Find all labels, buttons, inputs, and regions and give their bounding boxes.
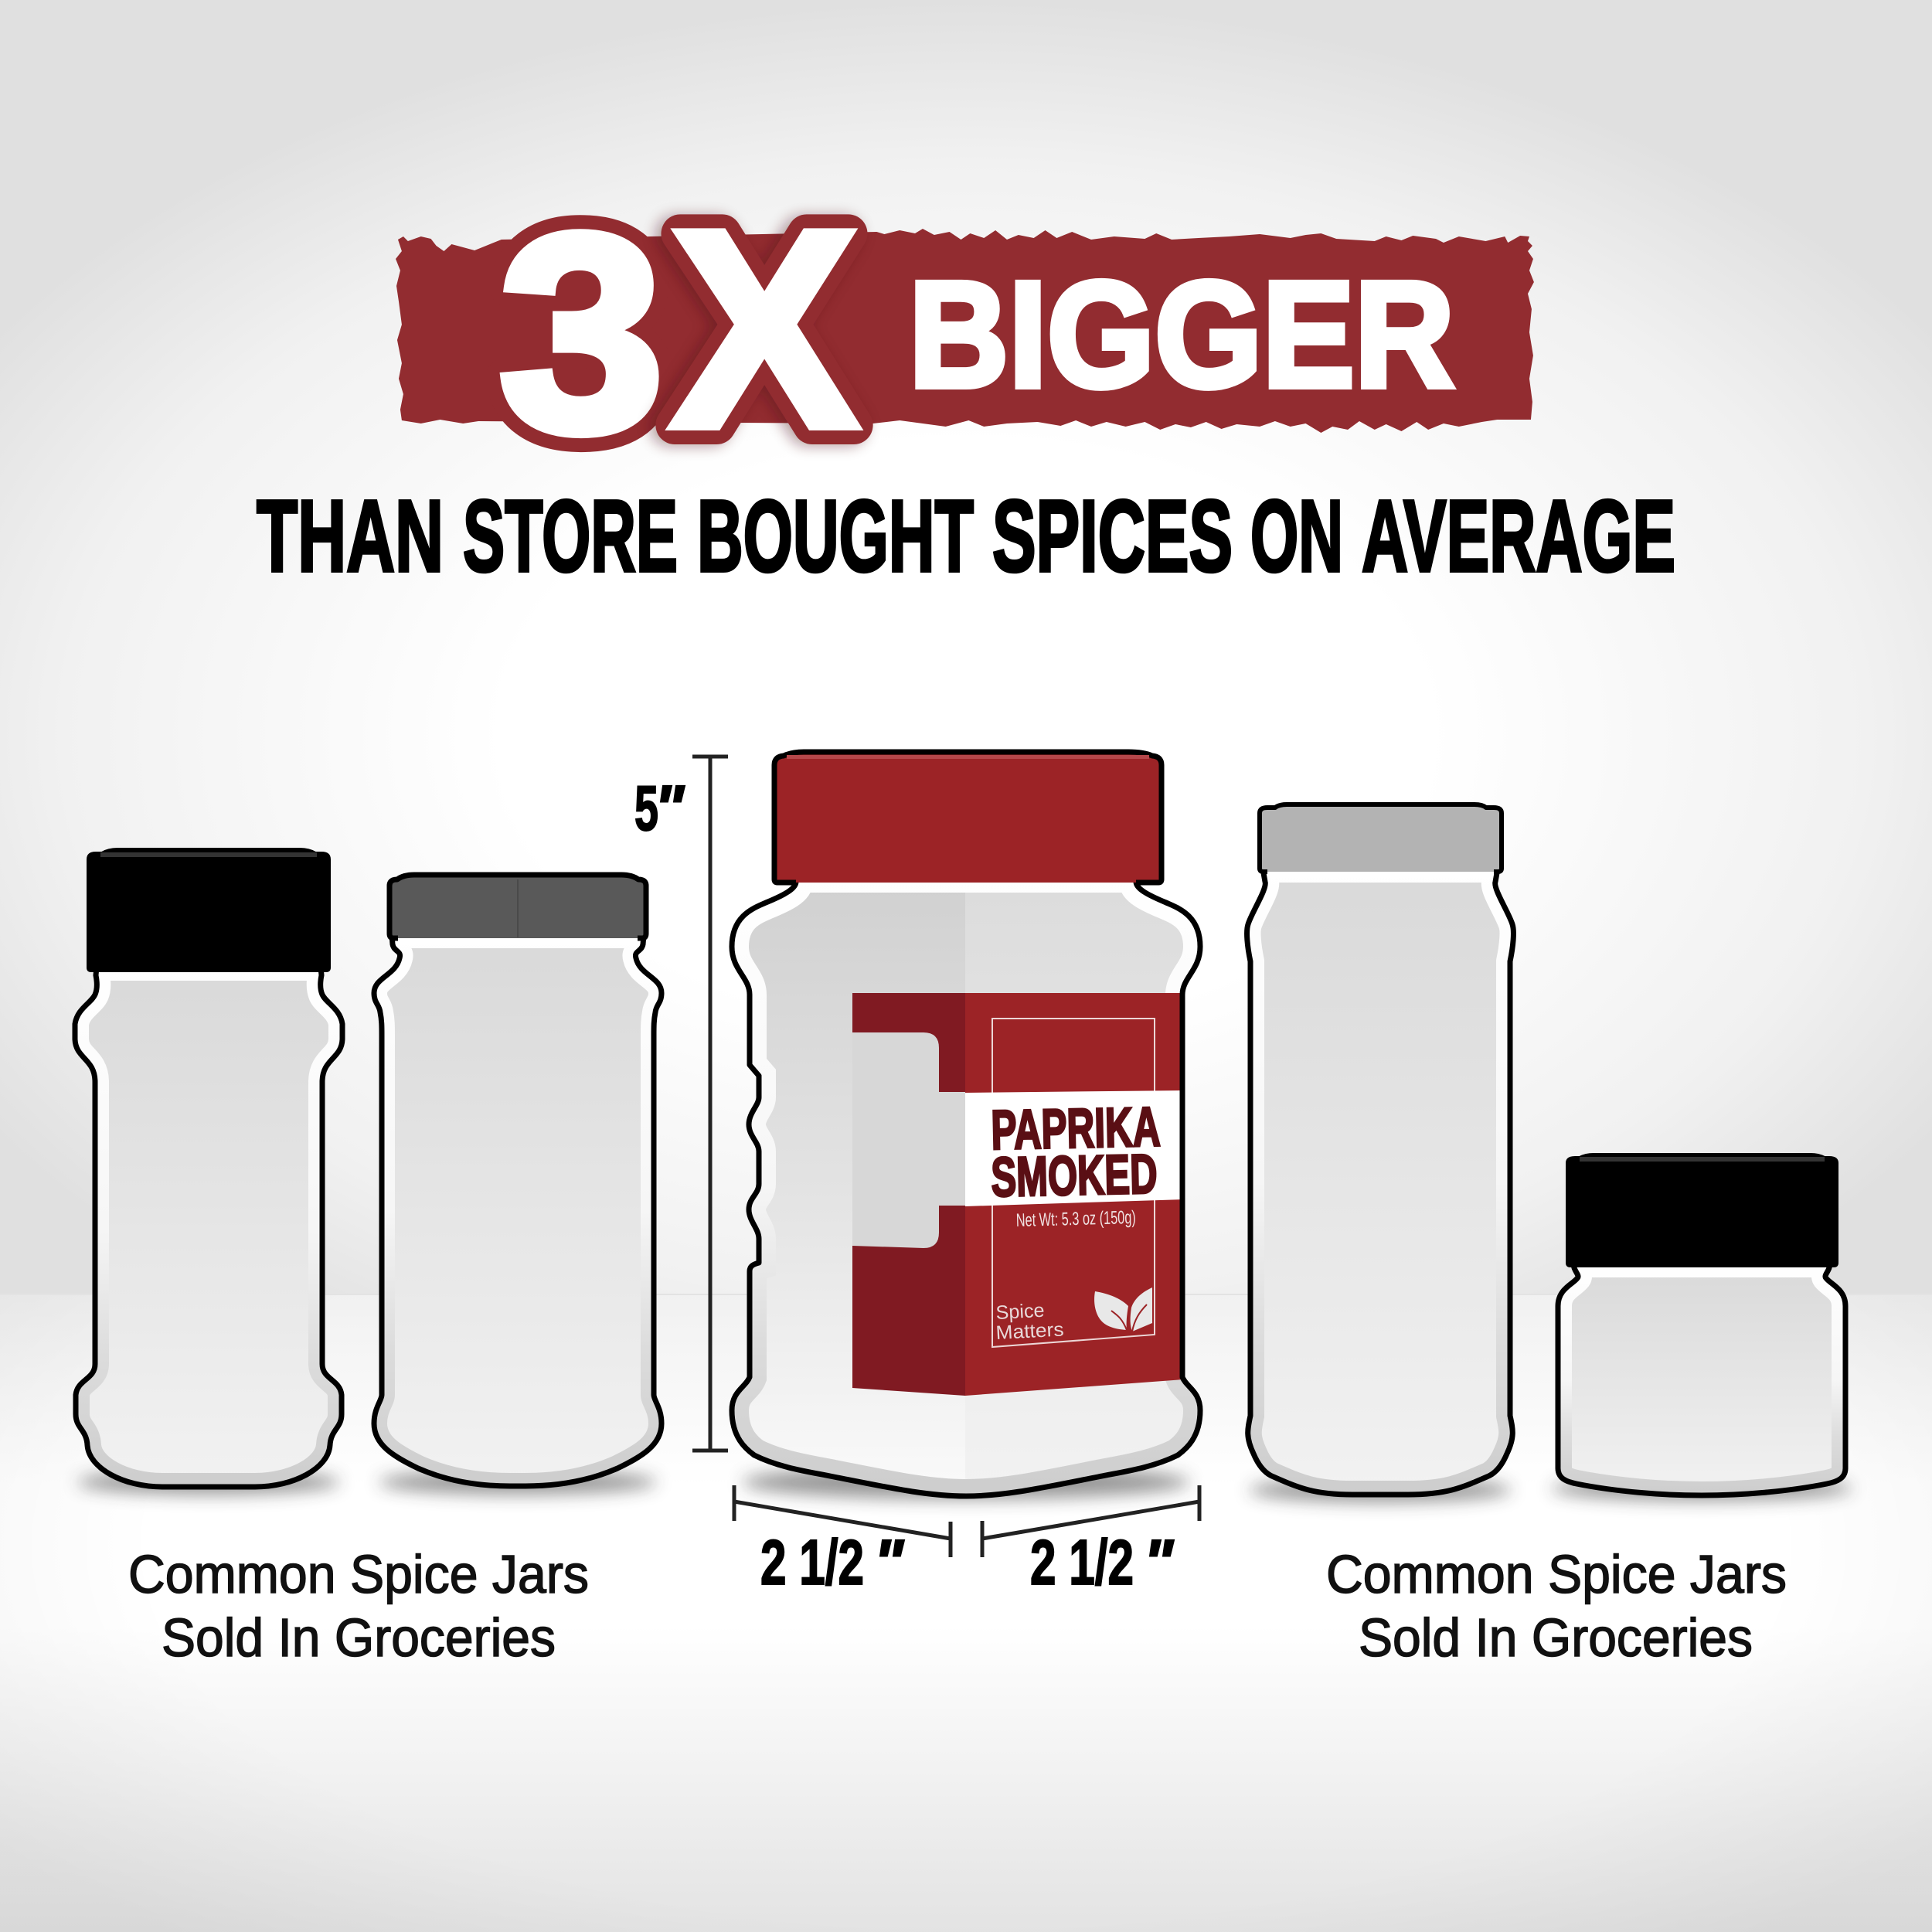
jar 2 cap <box>389 875 646 938</box>
width dimension left <box>734 1485 951 1557</box>
torn red brush banner <box>396 229 1534 433</box>
brand: Spice <box>995 1300 1045 1324</box>
jar 3 body <box>726 873 1206 1503</box>
subtitle: THAN <box>257 479 444 593</box>
caption right <box>1326 1544 1787 1668</box>
jar 4 body <box>1247 869 1513 1495</box>
width label left: '' <box>874 1526 904 1598</box>
jar 2: dark grey cap <box>374 875 662 1486</box>
jar 1 body <box>75 967 342 1487</box>
jar 4: light grey cap <box>1247 804 1513 1495</box>
letter X: X <box>667 175 852 486</box>
thin label frame <box>992 1019 1155 1347</box>
product name: PAPRIKA <box>991 1096 1161 1162</box>
word BIGGER: BIGGER <box>909 250 1454 419</box>
jar 4 cap <box>1260 804 1502 872</box>
subtitle: STORE <box>463 479 678 593</box>
caption right: Sold In Groceries <box>1359 1607 1753 1668</box>
width label left: 2 1/2 <box>760 1526 864 1598</box>
label: right face <box>965 993 1183 1396</box>
width label right: '' <box>1144 1526 1174 1598</box>
jar 5: short black cap <box>1558 1155 1845 1495</box>
subtitle: SPICES <box>992 479 1233 593</box>
numeral 3: 3 <box>499 176 664 489</box>
label: right face: Matters <box>995 1318 1064 1344</box>
icon: leaves <box>1094 1287 1152 1332</box>
jar 1 cap <box>88 849 329 971</box>
jar 3 cap <box>774 752 1162 883</box>
height label: '' <box>655 772 685 844</box>
background wall <box>0 0 1932 1294</box>
numeral 3: 3 <box>499 176 664 489</box>
subtitle: BOUGHT <box>697 479 974 593</box>
caption left <box>128 1544 589 1668</box>
letter X: X <box>672 174 858 485</box>
jar 5 body <box>1558 1264 1845 1495</box>
white name band <box>965 1090 1183 1206</box>
label: left face <box>852 993 965 1396</box>
caption left: Common Spice Jars <box>128 1544 589 1604</box>
banner: 3X bigger heading <box>396 174 1534 489</box>
jar 5 cap <box>1567 1155 1837 1266</box>
jar shadows <box>77 1465 1852 1502</box>
letter X: X <box>672 174 858 485</box>
subtitle <box>257 479 1675 593</box>
height label: 5 <box>634 772 658 844</box>
width label right: 2 1/2 <box>1030 1526 1134 1598</box>
height dimension <box>692 757 728 1451</box>
label: right face: SMOKED <box>991 1144 1158 1209</box>
jar 3: large paprika jar <box>726 752 1206 1503</box>
jar 1: black cap <box>75 849 342 1487</box>
subtitle: AVERAGE <box>1362 479 1675 593</box>
background floor <box>0 1294 1932 1932</box>
caption right: Common Spice Jars <box>1326 1544 1787 1604</box>
width dimension right <box>982 1485 1199 1557</box>
caption left: Sold In Groceries <box>162 1607 556 1668</box>
net weight: Net Wt: 5.3 oz (150g) <box>1015 1207 1136 1231</box>
jar 2 body <box>374 935 662 1486</box>
subtitle: ON <box>1250 479 1343 593</box>
